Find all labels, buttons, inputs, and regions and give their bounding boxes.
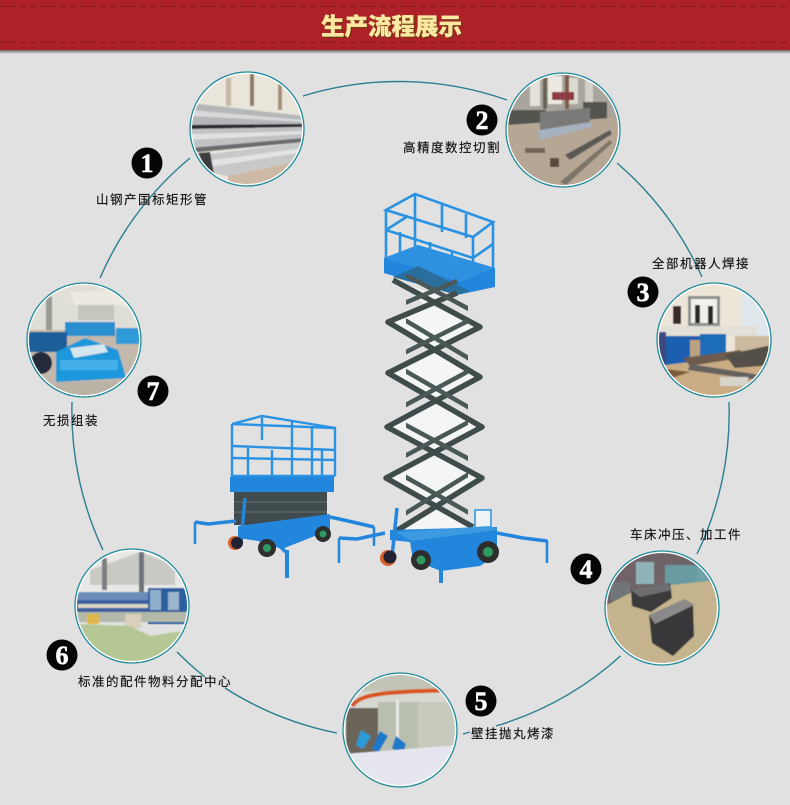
scissor openings: [386, 283, 482, 533]
step labels: 车床冲压、加工件: [630, 527, 742, 542]
small scissor lift, lowered: [195, 416, 374, 578]
title: 生产流程展示: [321, 14, 462, 40]
step labels: 标准的配件物料分配中心: [78, 674, 232, 689]
step labels: 山钢产国标矩形管: [96, 192, 208, 207]
photo 4: lathe and stamping: [605, 551, 720, 665]
photo 1: steel tubes: [190, 72, 305, 187]
photo 5: painting line: [343, 673, 460, 788]
number badges: 3: [636, 278, 650, 307]
photo 6: parts warehouse: [75, 549, 190, 665]
step labels: 壁挂抛丸烤漆: [471, 726, 555, 741]
step labels: 无损组装: [43, 414, 99, 428]
platform deck: [384, 245, 495, 295]
number badges: 6: [56, 641, 68, 670]
photo 7: lossless assembly: [27, 283, 142, 400]
photo 3: robot welding: [657, 283, 772, 398]
connecting ring arcs: [72, 82, 729, 734]
tall scissor lift, raised: [339, 194, 547, 583]
number badges: 2: [476, 106, 488, 135]
number badges: 4: [580, 555, 592, 584]
photo 2: cnc cutting: [506, 72, 621, 187]
number badges: [46, 104, 658, 716]
step labels: 全部机器人焊接: [652, 256, 750, 271]
title: 生产流程展示: [322, 15, 464, 41]
number badges: 1: [140, 149, 154, 178]
step labels: [43, 140, 750, 741]
number badges: 5: [474, 687, 488, 716]
base: [475, 510, 491, 528]
step labels: 高精度数控切割: [403, 140, 501, 155]
platform guard rail: [386, 194, 493, 280]
number badges: 7: [146, 377, 160, 406]
header banner: [0, 0, 790, 54]
scissor arms: [386, 280, 482, 533]
